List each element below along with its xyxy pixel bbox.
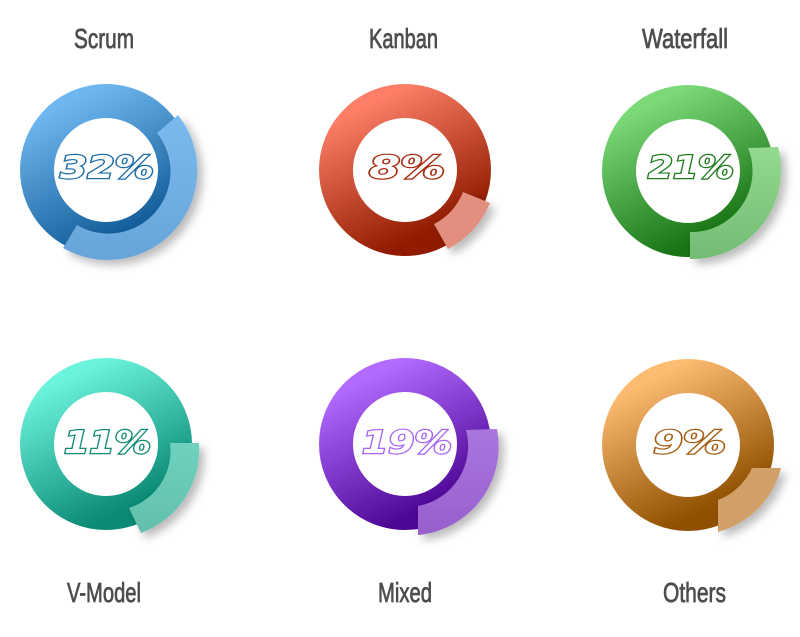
highlighted slice: Scrum [63,115,197,260]
donut chart: Scrum 32% [37,101,197,260]
heading: Kanban: Kanban [369,23,438,54]
ring: Others [619,376,757,514]
ring: Scrum [37,101,175,239]
heading: Waterfall: Waterfall [642,23,728,54]
donut chart: Waterfall 21% [619,102,781,259]
value: 32%: 32% [60,150,154,186]
ring: Kanban [336,101,474,239]
value: 19%: 19% [362,425,452,461]
donut chart: Others 9% [619,376,781,532]
donut chart: Mixed 19% [336,375,499,535]
value: 21%: 21% [648,150,734,186]
value: 8%: 8% [369,150,445,186]
value: 11%: 11% [64,425,151,461]
donut chart: Kanban 8% [336,101,490,249]
highlighted slice: V-Model [129,443,199,533]
heading: V-Model: V-Model [67,577,141,608]
highlighted slice: Others [718,468,781,532]
heading: Others: Others [663,577,726,608]
ring: Waterfall [619,102,757,240]
heading: Mixed: Mixed [378,577,432,608]
ring: Mixed [336,375,474,513]
ring: V-Model [37,375,175,513]
donut chart: V-Model 11% [37,375,199,533]
highlighted slice: Waterfall [690,147,781,259]
highlighted slice: Mixed [418,429,499,535]
highlighted slice: Kanban [434,192,490,249]
heading: Scrum: Scrum [74,23,134,54]
value: 9%: 9% [653,425,726,461]
